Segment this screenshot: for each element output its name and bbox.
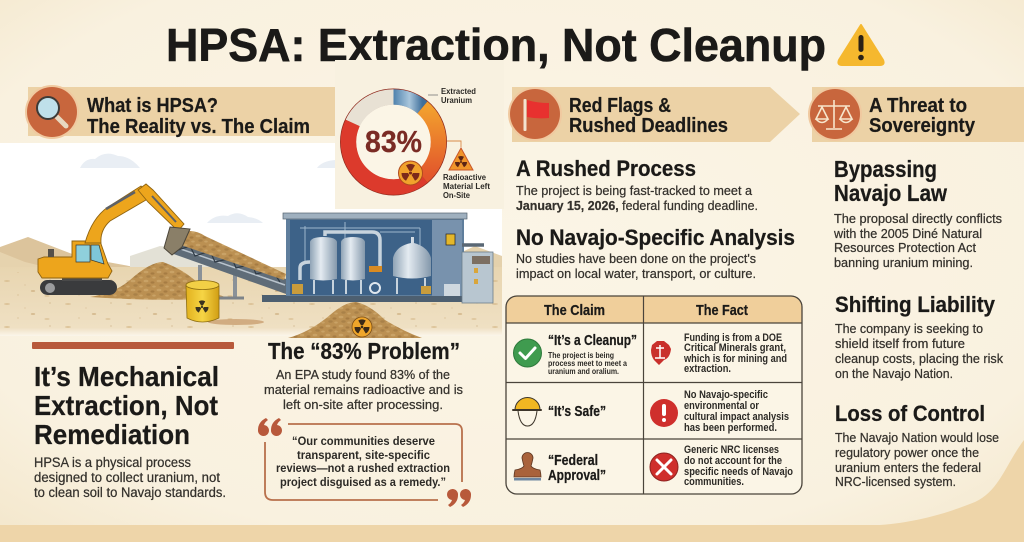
body text: The company is seeking to <box>835 321 983 336</box>
donut segments <box>348 97 439 187</box>
heading: mechanical extraction: Remediation <box>34 419 190 450</box>
row 1 fact <box>651 332 787 375</box>
heading <box>87 95 310 138</box>
body text <box>835 430 999 489</box>
excavator <box>38 184 190 295</box>
row 1 claim: The project is being <box>548 351 614 360</box>
legend: radioactive material: On-Site <box>443 191 471 200</box>
body text: NRC-licensed system. <box>835 474 956 489</box>
row 2 claim <box>513 398 606 426</box>
body text: cleanup costs, placing the risk <box>835 351 1003 366</box>
body text: banning uranium mining. <box>834 255 973 270</box>
body text: January 15, 2026, federal funding deadline. <box>516 198 758 213</box>
legend: extracted uranium: Extracted <box>441 87 476 96</box>
body text: shield itself from future <box>835 336 965 351</box>
text: HPSA description <box>34 455 226 500</box>
section: bypassing navajo law: Navajo Law <box>834 180 947 206</box>
icon: warning triangle <box>838 25 884 65</box>
clouds <box>80 154 335 223</box>
row 1 fact: Funding is from a DOE <box>684 332 782 344</box>
heading: Rushed Deadlines <box>569 115 728 137</box>
processing plant <box>262 213 493 303</box>
icon: closing quote mark <box>447 489 471 507</box>
panel: red flags header <box>508 87 800 142</box>
section: loss of control: Loss of Control <box>835 401 985 426</box>
heading: mechanical extraction <box>34 361 219 450</box>
heading: A Threat to <box>869 95 967 117</box>
row 2 fact: cultural impact analysis <box>684 411 789 423</box>
body text: The proposal directly conflicts <box>834 211 1002 226</box>
heading: The Reality vs. The Claim <box>87 116 310 138</box>
row 1 fact: extraction. <box>684 363 731 375</box>
quote text: transparent, site-specific <box>297 448 430 462</box>
text: EPA study <box>264 367 463 412</box>
heading: mechanical extraction: Extraction, Not <box>34 390 218 421</box>
row 2 fact: environmental or <box>684 400 760 412</box>
table: claim vs fact <box>506 296 802 494</box>
panel: what is HPSA header <box>25 85 335 139</box>
text: HPSA description: designed to collect uranium, not <box>34 470 220 485</box>
callout: quote <box>258 418 471 507</box>
body text <box>835 321 1003 381</box>
heading: 83 percent problem: The “83% Problem” <box>268 338 460 364</box>
section: shifting liability <box>835 292 1003 381</box>
text: HPSA description: to clean soil to Navajo standards. <box>34 485 226 500</box>
dirt pile <box>90 262 228 300</box>
section: a rushed process <box>516 156 758 213</box>
row 1 claim <box>514 333 637 376</box>
heading: Red Flags & <box>569 95 671 117</box>
heading: What is HPSA? <box>87 95 218 117</box>
accent bar <box>32 342 234 349</box>
panel: sovereignty header <box>808 87 1024 142</box>
text: EPA study: material remains radioactive and is <box>264 382 463 397</box>
row 2 fact: has been performed. <box>684 422 777 434</box>
section: no navajo-specific analysis <box>516 225 795 281</box>
text: EPA study: An EPA study found 83% of the <box>276 367 450 382</box>
radioactive waste pile <box>288 302 422 338</box>
body text: impact on local water, transport, or culture. <box>516 266 756 281</box>
table header: fact: The Fact <box>696 302 748 319</box>
body text <box>833 211 1002 270</box>
body text: The project is being fast-tracked to meet a <box>516 183 753 198</box>
conveyor <box>168 231 286 298</box>
legend: extracted uranium <box>428 87 476 105</box>
panel: 83 percent donut chart <box>335 60 504 209</box>
icon: scales of justice <box>808 87 862 141</box>
row 3 claim: “Federal <box>548 453 598 469</box>
title: HPSA: Extraction, Not Cleanup <box>166 19 826 71</box>
bottom sand band <box>0 440 1024 542</box>
body text: Resources Protection Act <box>834 240 976 255</box>
quote text: “Our communities deserve <box>292 434 435 448</box>
body text: No studies have been done on the project's <box>516 251 756 266</box>
row 1 fact: Critical Minerals grant, <box>684 342 786 354</box>
body text: regulatory power once the <box>835 445 979 460</box>
row 3 fact: Generic NRC licenses <box>684 444 779 456</box>
row 3 fact: specific needs of Navajo <box>684 466 793 478</box>
icon: opening quote mark <box>258 418 282 436</box>
row 1 fact: which is for mining and <box>683 353 787 365</box>
row 3 claim: Approval” <box>548 468 606 484</box>
legend: radioactive material <box>443 141 490 200</box>
hills <box>0 237 502 270</box>
legend: radioactive material: Radioactive <box>443 173 487 182</box>
row 3 fact: do not account for the <box>684 455 782 467</box>
row 3 fact: communities. <box>684 476 744 488</box>
legend: radioactive material: Material Left <box>443 182 490 191</box>
barrel <box>186 280 219 322</box>
heading <box>869 95 976 137</box>
text: EPA study: left on-site after processing. <box>283 397 443 412</box>
ground <box>0 267 502 336</box>
section: no navajo-specific analysis: No Navajo-Specific Analysis <box>516 225 795 250</box>
table header: claim: The Claim <box>544 302 605 319</box>
icon: magnifying glass <box>25 85 79 139</box>
row 1 claim: uranium and oralium. <box>548 367 619 376</box>
heading: mechanical extraction: It’s Mechanical <box>34 361 219 392</box>
row 3 fact <box>650 444 793 488</box>
section: loss of control <box>835 401 999 489</box>
legend: extracted uranium: Uranium <box>441 96 472 105</box>
section: shifting liability: Shifting Liability <box>835 292 996 317</box>
donut value: 83% <box>365 124 422 159</box>
body text: with the 2005 Diné Natural <box>833 226 982 241</box>
section: a rushed process: A Rushed Process <box>516 156 696 181</box>
body text: The Navajo Nation would lose <box>835 430 999 445</box>
row 2 fact <box>650 389 789 434</box>
illustration: excavator and processing plant <box>0 143 502 338</box>
icon: radiation badge <box>398 161 422 185</box>
row 2 fact: No Navajo-specific <box>684 389 768 401</box>
heading <box>569 95 728 137</box>
body text: uranium enters the federal <box>835 460 981 475</box>
row 1 claim: “It’s a Cleanup” <box>548 333 637 349</box>
text: HPSA description: HPSA is a physical process <box>34 455 191 470</box>
row 2 claim: “It’s Safe” <box>548 404 606 420</box>
row 3 claim <box>514 452 606 484</box>
body text <box>516 183 758 213</box>
section: bypassing navajo law <box>833 156 1002 270</box>
body text <box>516 251 756 281</box>
icon: red flag <box>508 87 562 141</box>
quote text <box>276 434 450 489</box>
quote text: project disguised as a remedy.” <box>280 475 446 489</box>
quote text: reviews—not a rushed extraction <box>276 461 450 475</box>
body text: on the Navajo Nation. <box>835 366 953 381</box>
heading: Sovereignty <box>869 115 976 137</box>
row 1 claim: process meet to meet a <box>548 359 627 368</box>
section: bypassing navajo law: Bypassing <box>834 156 937 182</box>
